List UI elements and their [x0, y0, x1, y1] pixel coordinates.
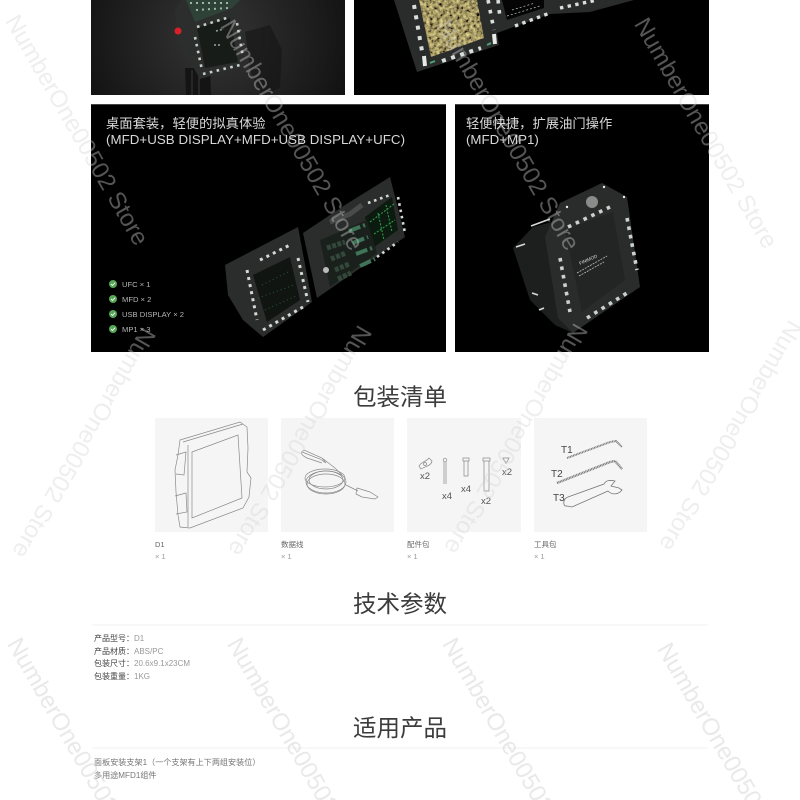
panel: stand-mounted setup — [91, 0, 345, 95]
quantity labels: x2 — [420, 471, 430, 482]
spec list: 产品型号：D1 — [94, 633, 145, 643]
icon: MFD with throttle — [513, 183, 640, 333]
label: D1 — [155, 540, 166, 561]
label: cable: × 1 — [281, 552, 292, 561]
label: tools — [534, 539, 557, 561]
tool labels: T2 — [551, 469, 563, 480]
label: tools: 工具包 — [534, 539, 557, 549]
watermark: NumberOne00502 Store — [628, 13, 783, 253]
spec list: 产品材质：ABS/PC — [94, 646, 164, 656]
icon: MFD with throttle: FINIMOD — [578, 253, 599, 266]
label: accessories: 配件包 — [407, 539, 430, 549]
watermark: NumberOne00502 Store — [438, 319, 593, 559]
legend — [109, 280, 184, 334]
spec list — [94, 633, 190, 681]
heading: desktop kit: 桌面套装，轻便的拟真体验 — [106, 116, 266, 131]
quantity labels: x4 — [442, 491, 452, 502]
watermark: NumberOne00502 Store — [222, 321, 377, 561]
compatible products text: 面板安装支架1（一个支架有上下两组安装位） — [94, 757, 260, 767]
heading: compatible products: 适用产品 — [353, 715, 447, 741]
package item: tools — [534, 418, 647, 561]
watermark: NumberOne00502 Store — [0, 10, 154, 250]
package item: data cable — [281, 418, 394, 561]
heading: light kit — [466, 116, 612, 147]
tool labels: T1 — [561, 445, 573, 456]
compatible products text — [94, 757, 260, 780]
label: cable — [281, 539, 304, 561]
icon: MFD pair with terrain screen — [394, 0, 634, 72]
heading: light kit: (MFD+MP1) — [466, 132, 539, 147]
legend item: MP1: MP1 × 3 — [122, 325, 150, 334]
icon: knob — [586, 196, 598, 208]
line drawing: cable — [301, 450, 378, 499]
compatible products text: 多用途MFD1组件 — [94, 770, 157, 780]
line drawing: screws — [419, 458, 509, 491]
spec list: 包装重量：1KG — [94, 671, 150, 681]
quantity labels: x2 — [502, 467, 512, 478]
icon: mounted MFD — [174, 0, 245, 79]
tool labels: T3 — [553, 493, 565, 504]
package item: accessories — [407, 418, 521, 561]
package item: D1 — [155, 418, 268, 561]
legend item: UFC: UFC × 1 — [122, 280, 150, 289]
icon: desktop kit device — [225, 177, 405, 337]
quantity labels: x2 — [481, 496, 491, 507]
line drawing: D1 panel — [175, 422, 251, 528]
panel: desktop kit — [91, 104, 446, 352]
heading: specs: 技术参数 — [353, 591, 447, 617]
heading: desktop kit — [106, 116, 405, 147]
label: accessories: × 1 — [407, 552, 418, 561]
spec list: 包装尺寸：20.6x9.1x23CM — [94, 658, 190, 668]
stand — [185, 68, 211, 95]
icon: red button — [174, 28, 182, 34]
quantity labels — [420, 467, 512, 507]
heading: desktop kit: (MFD+USB DISPLAY+MFD+USB DISPLAY+UFC) — [106, 132, 405, 147]
heading: package list: 包装清单 — [353, 384, 447, 410]
panel: dual MFD on black — [354, 0, 709, 95]
quantity labels: x4 — [461, 484, 471, 495]
legend item: USB display: USB DISPLAY × 2 — [122, 310, 184, 319]
label: cable: 数据线 — [281, 539, 304, 549]
shadowed throttle — [245, 25, 282, 95]
heading: light kit: 轻便快捷，扩展油门操作 — [466, 116, 612, 131]
watermark: NumberOne00502 Store — [430, 15, 585, 255]
line drawing: tools — [557, 441, 622, 507]
watermark: NumberOne00502 Store — [214, 15, 369, 255]
watermark: NumberOne00502 Store — [6, 323, 161, 563]
label: D1: × 1 — [155, 552, 166, 561]
panel: light kit — [455, 104, 709, 352]
tool labels — [551, 445, 573, 504]
label: D1: D1 — [155, 540, 165, 549]
label: accessories — [407, 539, 430, 561]
label: tools: × 1 — [534, 552, 545, 561]
legend item: MFD: MFD × 2 — [122, 295, 151, 304]
